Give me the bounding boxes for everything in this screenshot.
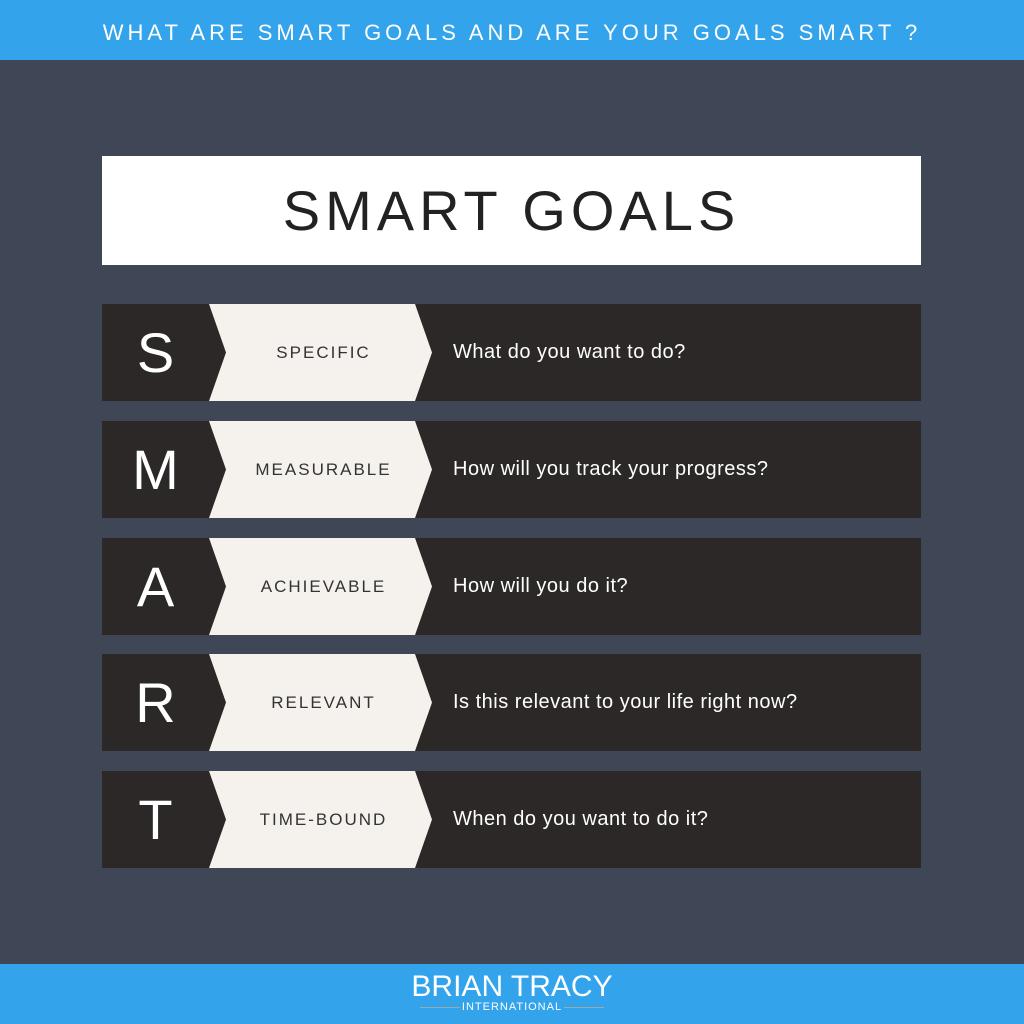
footer logo [0, 964, 1024, 1024]
row: A achievable: ACHIEVABLE [261, 577, 386, 596]
header bar [0, 0, 1024, 60]
row: T time-bound: T [138, 788, 173, 851]
row: S specific: SPECIFIC [276, 343, 371, 362]
title box [102, 156, 921, 265]
footer logo: INTERNATIONAL [462, 1001, 562, 1013]
row: R relevant [102, 654, 921, 751]
row: R relevant: Is this relevant to your life right now? [453, 691, 798, 713]
row: M measurable [102, 421, 921, 518]
footer logo: BRIAN TRACY [411, 970, 613, 1003]
row: T time-bound: When do you want to do it? [453, 808, 708, 830]
row: T time-bound: TIME-BOUND [260, 810, 387, 829]
row: M measurable: MEASURABLE [255, 460, 392, 479]
row: M measurable: M [132, 438, 179, 501]
row: A achievable: A [137, 555, 174, 618]
row: S specific [102, 304, 921, 401]
row: R relevant: RELEVANT [271, 693, 376, 712]
row: R relevant: R [135, 671, 176, 734]
row: M measurable: How will you track your progress? [453, 458, 768, 480]
title box: SMART GOALS [283, 179, 740, 242]
row: A achievable [102, 538, 921, 635]
header bar: WHAT ARE SMART GOALS AND ARE YOUR GOALS SMART ? [103, 20, 921, 45]
row: S specific: What do you want to do? [453, 341, 686, 363]
row: T time-bound [102, 771, 921, 868]
row: A achievable: How will you do it? [453, 575, 628, 597]
row: S specific: S [137, 321, 174, 384]
